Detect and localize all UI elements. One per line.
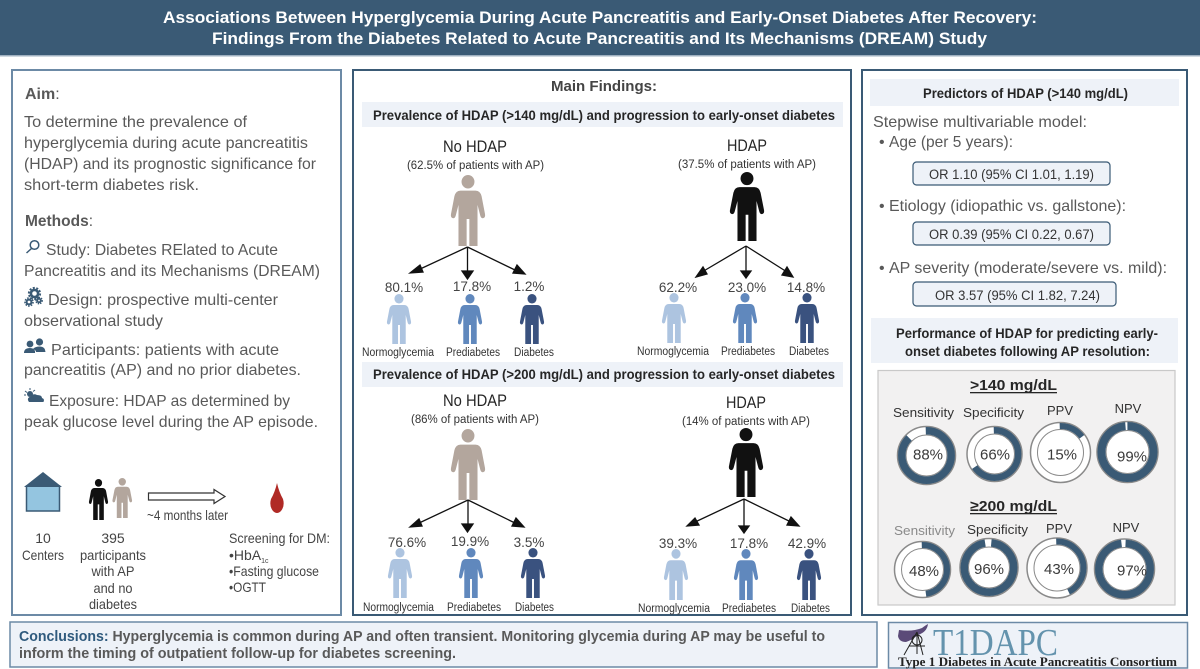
donut: sensitivity 88%: 88% bbox=[913, 446, 943, 464]
values bbox=[659, 536, 826, 551]
metric labels: 200: NPV bbox=[1113, 520, 1140, 535]
values: 19.9% bbox=[451, 534, 489, 549]
metric labels: 200: Specificity bbox=[967, 522, 1029, 537]
label: participants: 395 bbox=[101, 530, 125, 546]
donut: PPV 15%: 15% bbox=[1047, 446, 1077, 464]
labels: Normoglycemia bbox=[638, 603, 711, 615]
icons: outcome people bbox=[662, 293, 819, 343]
labels bbox=[362, 347, 554, 359]
label: months later: ~4 months later bbox=[147, 507, 228, 523]
text: stepwise model: Stepwise multivariable model: bbox=[873, 114, 1087, 131]
icons: outcome people bbox=[388, 548, 545, 598]
predictor: age bbox=[879, 134, 1110, 185]
labels: Prediabetes bbox=[721, 346, 775, 358]
labels: Prediabetes bbox=[722, 603, 776, 615]
sub heading: (86% of patients with AP) bbox=[411, 414, 539, 426]
predictor: etiology: OR 0.39 (95% CI 0.22, 0.67) bbox=[929, 227, 1094, 242]
metric labels: 140: Sensitivity bbox=[893, 405, 955, 420]
group: no HDAP 140 bbox=[362, 137, 554, 359]
values: 80.1% bbox=[385, 280, 423, 295]
values: 76.6% bbox=[388, 535, 426, 550]
band: predictors heading: Predictors of HDAP (>140 mg/dL) bbox=[923, 86, 1128, 101]
aim text bbox=[24, 114, 317, 194]
labels bbox=[637, 346, 829, 358]
heading: 140: >140 mg/dL bbox=[970, 377, 1057, 394]
values: 23.0% bbox=[728, 280, 766, 295]
donut: NPV 99% bbox=[1097, 422, 1158, 482]
icon: black person bbox=[729, 428, 763, 497]
icon: blood drop bbox=[270, 483, 284, 513]
heading: HDAP bbox=[726, 393, 766, 412]
panel: conclusions bbox=[10, 622, 877, 667]
heading: aim: Aim: bbox=[25, 86, 60, 103]
design text: observational study bbox=[24, 313, 163, 330]
predictor: age: • bbox=[879, 134, 885, 151]
heading: No HDAP bbox=[443, 137, 507, 156]
values bbox=[388, 534, 544, 550]
donut: NPV 99%: 99% bbox=[1117, 448, 1147, 466]
labels: Normoglycemia bbox=[363, 602, 435, 614]
panel: predictors and performance bbox=[862, 70, 1187, 615]
exposure text: Exposure: HDAP as determined by bbox=[49, 393, 290, 410]
predictor: severity: OR 3.57 (95% CI 1.82, 7.24) bbox=[935, 288, 1100, 303]
values: 1.2% bbox=[514, 279, 544, 294]
band: performance heading: Performance of HDAP for predicting early- bbox=[896, 326, 1158, 341]
donut: sensitivity 88% bbox=[898, 426, 956, 484]
metric labels: 200: PPV bbox=[1046, 521, 1072, 536]
labels: Normoglycemia bbox=[637, 346, 710, 358]
icon: grey person bbox=[451, 175, 485, 246]
labels: Diabetes bbox=[515, 602, 554, 614]
donut: sensitivity 48%: 48% bbox=[909, 563, 939, 580]
sub heading: (14% of patients with AP) bbox=[682, 416, 810, 428]
study text: Pancreatitis and its Mechanisms (DREAM) bbox=[24, 263, 320, 280]
band: 140 mg/dL heading bbox=[362, 102, 843, 127]
icon: participants figures bbox=[89, 478, 132, 520]
labels: Diabetes bbox=[789, 346, 829, 358]
predictor: age: OR 1.10 (95% CI 1.01, 1.19) bbox=[929, 167, 1094, 182]
label: screening: •HbA bbox=[229, 547, 261, 563]
labels: Prediabetes bbox=[446, 347, 500, 359]
participants text bbox=[24, 342, 301, 379]
label: participants bbox=[80, 530, 146, 612]
icon: magnifier bbox=[26, 241, 39, 253]
aim text: short-term diabetes risk. bbox=[24, 177, 199, 194]
predictor: severity: AP severity (moderate/severe vs. mild): bbox=[889, 260, 1167, 277]
panel: conclusions: inform the timing of outpatient follow-up for diabetes screening. bbox=[19, 646, 456, 662]
sub heading: (37.5% of patients with AP) bbox=[678, 159, 816, 171]
icons: outcome people bbox=[664, 549, 821, 600]
values bbox=[385, 279, 544, 295]
metric labels: 200 bbox=[894, 520, 1140, 538]
donut: specificity 66% bbox=[967, 426, 1022, 482]
band: performance heading: onset diabetes following AP resolution: bbox=[905, 344, 1150, 359]
design text bbox=[24, 292, 279, 330]
study text: Study: Diabetes RElated to Acute bbox=[46, 242, 278, 259]
title banner: Findings From the Diabetes Related to Acute Pancreatitis and Its Mechanisms (DREAM) Study bbox=[212, 30, 988, 48]
arrows bbox=[410, 500, 524, 532]
label: participants: participants bbox=[80, 547, 146, 563]
metric labels: 140: PPV bbox=[1047, 403, 1073, 418]
label: participants: with AP bbox=[91, 563, 134, 579]
label: screening: •Fasting glucose bbox=[229, 563, 319, 579]
label: screening: 1c bbox=[261, 558, 269, 565]
participants text: Participants: patients with acute bbox=[51, 342, 279, 359]
band: 140 mg/dL heading: Prevalence of HDAP (>140 mg/dL) and progression to early-onset diabetes bbox=[373, 108, 835, 123]
donut: specificity 96% bbox=[960, 538, 1018, 596]
predictor: etiology: • bbox=[879, 198, 885, 215]
title banner: Associations Between Hyperglycemia During Acute Pancreatitis and Early-Onset Diabetes After Recovery: bbox=[163, 9, 1037, 27]
panel: aim and methods bbox=[12, 70, 341, 615]
predictor: severity bbox=[879, 260, 1167, 306]
metric labels: 200: Sensitivity bbox=[894, 523, 956, 538]
donut: PPV 43% bbox=[1027, 538, 1087, 598]
values: 14.8% bbox=[787, 280, 825, 295]
heading: HDAP bbox=[727, 136, 767, 155]
metric labels: 140: Specificity bbox=[963, 405, 1025, 420]
panel: T1DAPC logo bbox=[888, 622, 1188, 669]
panel: conclusions: Conclusions: Hyperglycemia is common during AP and often transient. Monitoring glycemia during AP may be useful to bbox=[19, 629, 825, 645]
heading: main findings: Main Findings: bbox=[551, 79, 657, 95]
logo caption: Type 1 Diabetes in Acute Pancreatitis Consortium bbox=[898, 655, 1178, 669]
sub heading: (62.5% of patients with AP) bbox=[407, 160, 544, 172]
label: screening: •OGTT bbox=[229, 579, 266, 595]
group: HDAP 200 bbox=[638, 393, 830, 615]
group: HDAP 140 bbox=[637, 136, 829, 358]
label: centers: Centers bbox=[22, 547, 64, 563]
labels: Diabetes bbox=[514, 347, 554, 359]
labels bbox=[363, 602, 554, 614]
label: screening: Screening for DM: bbox=[229, 530, 330, 546]
exposure text bbox=[24, 393, 318, 431]
aim text: hyperglycemia during acute pancreatitis bbox=[24, 135, 308, 152]
donut: specificity 66%: 66% bbox=[980, 446, 1010, 464]
donut: PPV 15% bbox=[1030, 422, 1090, 482]
label: participants: diabetes bbox=[89, 596, 137, 612]
predictor: age: Age (per 5 years): bbox=[889, 134, 1013, 151]
panel: performance charts bbox=[878, 370, 1175, 605]
icons: outcome people bbox=[387, 294, 544, 344]
title banner bbox=[0, 0, 1200, 56]
band: predictors heading bbox=[870, 79, 1179, 106]
icon: house bbox=[24, 472, 62, 511]
aim text: To determine the prevalence of bbox=[24, 114, 248, 131]
heading: methods: Methods: bbox=[25, 213, 93, 230]
heading: No HDAP bbox=[443, 391, 507, 410]
aim text: (HDAP) and its prognostic significance for bbox=[24, 156, 317, 173]
icon: grey person bbox=[451, 429, 485, 500]
donut: specificity 96%: 96% bbox=[974, 561, 1004, 578]
values bbox=[659, 280, 825, 295]
values: 3.5% bbox=[514, 535, 544, 550]
heading: 200: ≥200 mg/dL bbox=[970, 498, 1057, 515]
label: participants: and no bbox=[94, 580, 133, 596]
group: no HDAP 200 bbox=[363, 391, 554, 614]
labels: Diabetes bbox=[791, 603, 830, 615]
label: centers bbox=[22, 530, 64, 563]
exposure text: peak glucose level during the AP episode. bbox=[24, 414, 318, 431]
arrows bbox=[687, 499, 799, 533]
arrows bbox=[696, 246, 793, 278]
values: 39.3% bbox=[659, 536, 697, 551]
band: 200 mg/dL heading bbox=[362, 362, 843, 387]
metric labels: 140: NPV bbox=[1115, 401, 1142, 416]
arrow: follow-up bbox=[148, 490, 225, 504]
donut: sensitivity 48% bbox=[894, 542, 950, 598]
predictor: etiology: Etiology (idiopathic vs. gallstone): bbox=[889, 198, 1126, 215]
icon: gears bbox=[25, 288, 42, 306]
design text: Design: prospective multi-center bbox=[48, 292, 279, 309]
icon: saddle tripod bbox=[898, 624, 928, 655]
participants text: pancreatitis (AP) and no prior diabetes. bbox=[24, 362, 301, 379]
logo wordmark: T1DAPC bbox=[933, 622, 1058, 664]
donut: PPV 43%: 43% bbox=[1044, 561, 1074, 578]
predictor: etiology bbox=[879, 198, 1126, 245]
values: 42.9% bbox=[788, 536, 826, 551]
study text bbox=[24, 242, 320, 280]
icon: black person bbox=[730, 172, 764, 241]
icon: people bbox=[24, 338, 46, 353]
arrows bbox=[410, 247, 525, 279]
values: 17.8% bbox=[453, 279, 491, 294]
labels: Prediabetes bbox=[447, 602, 501, 614]
band: 200 mg/dL heading: Prevalence of HDAP (>200 mg/dL) and progression to early-onset diabetes bbox=[373, 367, 835, 382]
band: performance heading bbox=[871, 318, 1178, 363]
icon: cloud and sun bbox=[24, 388, 44, 402]
labels bbox=[638, 603, 830, 615]
values: 62.2% bbox=[659, 280, 697, 295]
donut: NPV 97% bbox=[1094, 539, 1154, 599]
metric labels: 140 bbox=[893, 401, 1142, 420]
labels: Normoglycemia bbox=[362, 347, 435, 359]
panel: main findings bbox=[353, 70, 851, 615]
donut: NPV 97%: 97% bbox=[1117, 562, 1147, 580]
label: centers: 10 bbox=[35, 530, 51, 546]
label: screening bbox=[229, 530, 330, 595]
values: 17.8% bbox=[730, 536, 768, 551]
predictor: severity: • bbox=[879, 260, 885, 277]
